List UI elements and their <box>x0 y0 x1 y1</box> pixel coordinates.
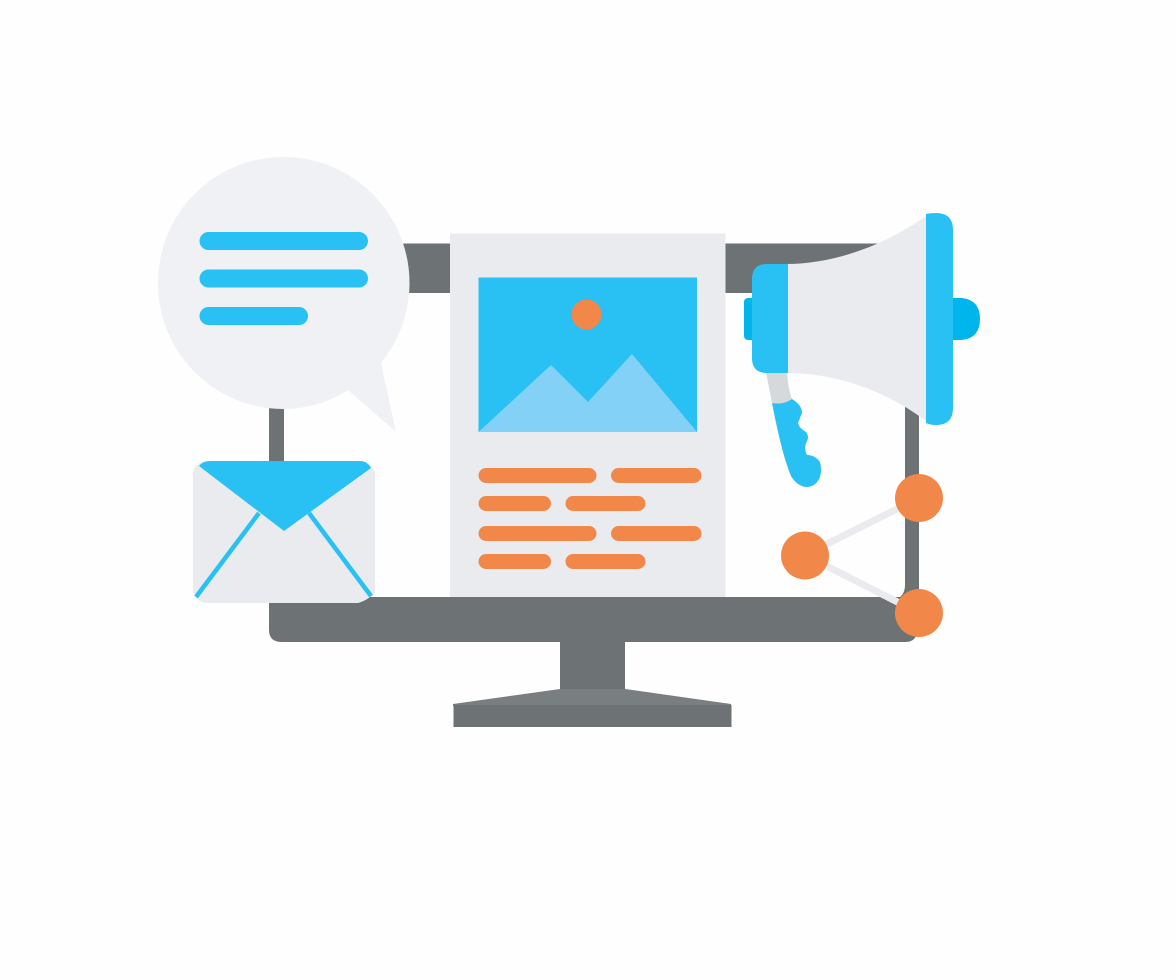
bezel overlap on envelope <box>358 597 380 606</box>
base front <box>454 705 732 727</box>
monitor base <box>453 689 732 727</box>
envelope flap <box>199 461 371 531</box>
image background <box>478 278 697 432</box>
front cap <box>950 298 980 340</box>
row 1 <box>478 468 702 483</box>
monitor frame left side <box>269 400 284 470</box>
connector lower <box>805 555 919 613</box>
monitor frame right side <box>895 400 919 600</box>
line 1 <box>200 232 368 250</box>
row 3 <box>478 526 702 541</box>
rear housing <box>752 264 788 373</box>
document panel <box>450 234 726 597</box>
line 3 <box>200 307 308 325</box>
monitor <box>269 244 919 727</box>
node bottom <box>895 589 943 637</box>
handle grip <box>772 399 821 487</box>
bubble shape <box>158 157 410 432</box>
monitor bottom bezel <box>269 597 917 642</box>
monitor neck <box>560 640 625 690</box>
envelope right fold <box>309 513 371 596</box>
row 2 <box>478 496 646 511</box>
speech bubble <box>158 157 410 432</box>
back cap <box>744 298 758 340</box>
image placeholder <box>478 278 697 432</box>
node left <box>781 532 829 580</box>
horn rim <box>926 213 953 425</box>
row 4 <box>478 554 646 569</box>
text lines <box>478 468 702 569</box>
sun <box>572 300 602 330</box>
node top <box>895 474 943 522</box>
document page <box>450 234 726 597</box>
icon: envelope <box>193 461 375 603</box>
handle neck <box>766 372 792 404</box>
envelope body <box>193 461 375 603</box>
horn <box>786 216 926 421</box>
bubble lines <box>200 232 368 325</box>
envelope left fold <box>196 513 259 597</box>
line 2 <box>200 270 368 288</box>
icon: share network <box>781 474 943 637</box>
base top highlight <box>453 689 731 706</box>
monitor frame top bar <box>400 244 885 293</box>
mountains <box>478 354 697 432</box>
connector upper <box>805 498 919 555</box>
icon: megaphone <box>744 213 980 487</box>
